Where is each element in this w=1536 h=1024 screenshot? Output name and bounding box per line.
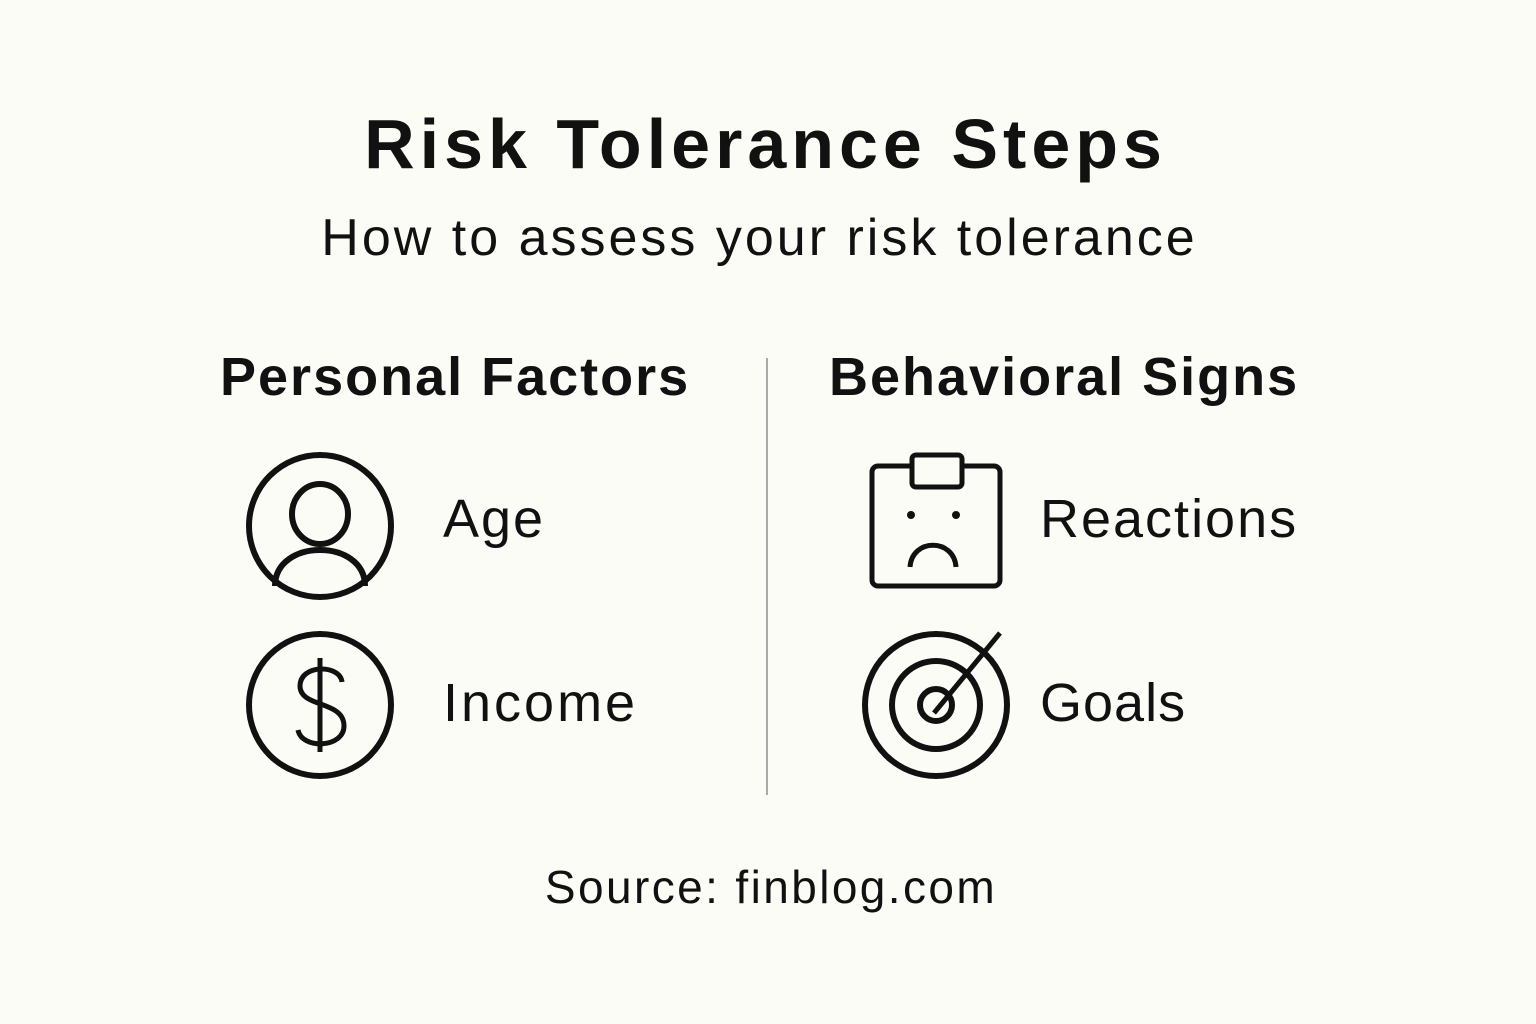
source: Source: finblog.com bbox=[545, 861, 997, 913]
icon: person bbox=[246, 452, 394, 600]
title: Risk Tolerance Steps bbox=[364, 105, 1167, 183]
icon: target bbox=[862, 631, 1010, 779]
panel: behavioral signs bbox=[829, 347, 1299, 779]
heading: behavioral signs: Behavioral Signs bbox=[829, 347, 1299, 407]
label: income: Income bbox=[443, 673, 638, 733]
icon: dollar bbox=[246, 631, 394, 779]
label: goals: Goals bbox=[1040, 673, 1186, 733]
subtitle: How to assess your risk tolerance bbox=[321, 209, 1198, 267]
label: reactions: Reactions bbox=[1040, 489, 1298, 549]
panel: personal factors bbox=[220, 347, 690, 779]
label: age: Age bbox=[443, 489, 545, 549]
heading: personal factors: Personal Factors bbox=[220, 347, 690, 407]
icon: clipboard sad face bbox=[870, 452, 1002, 588]
divider bbox=[766, 358, 768, 795]
